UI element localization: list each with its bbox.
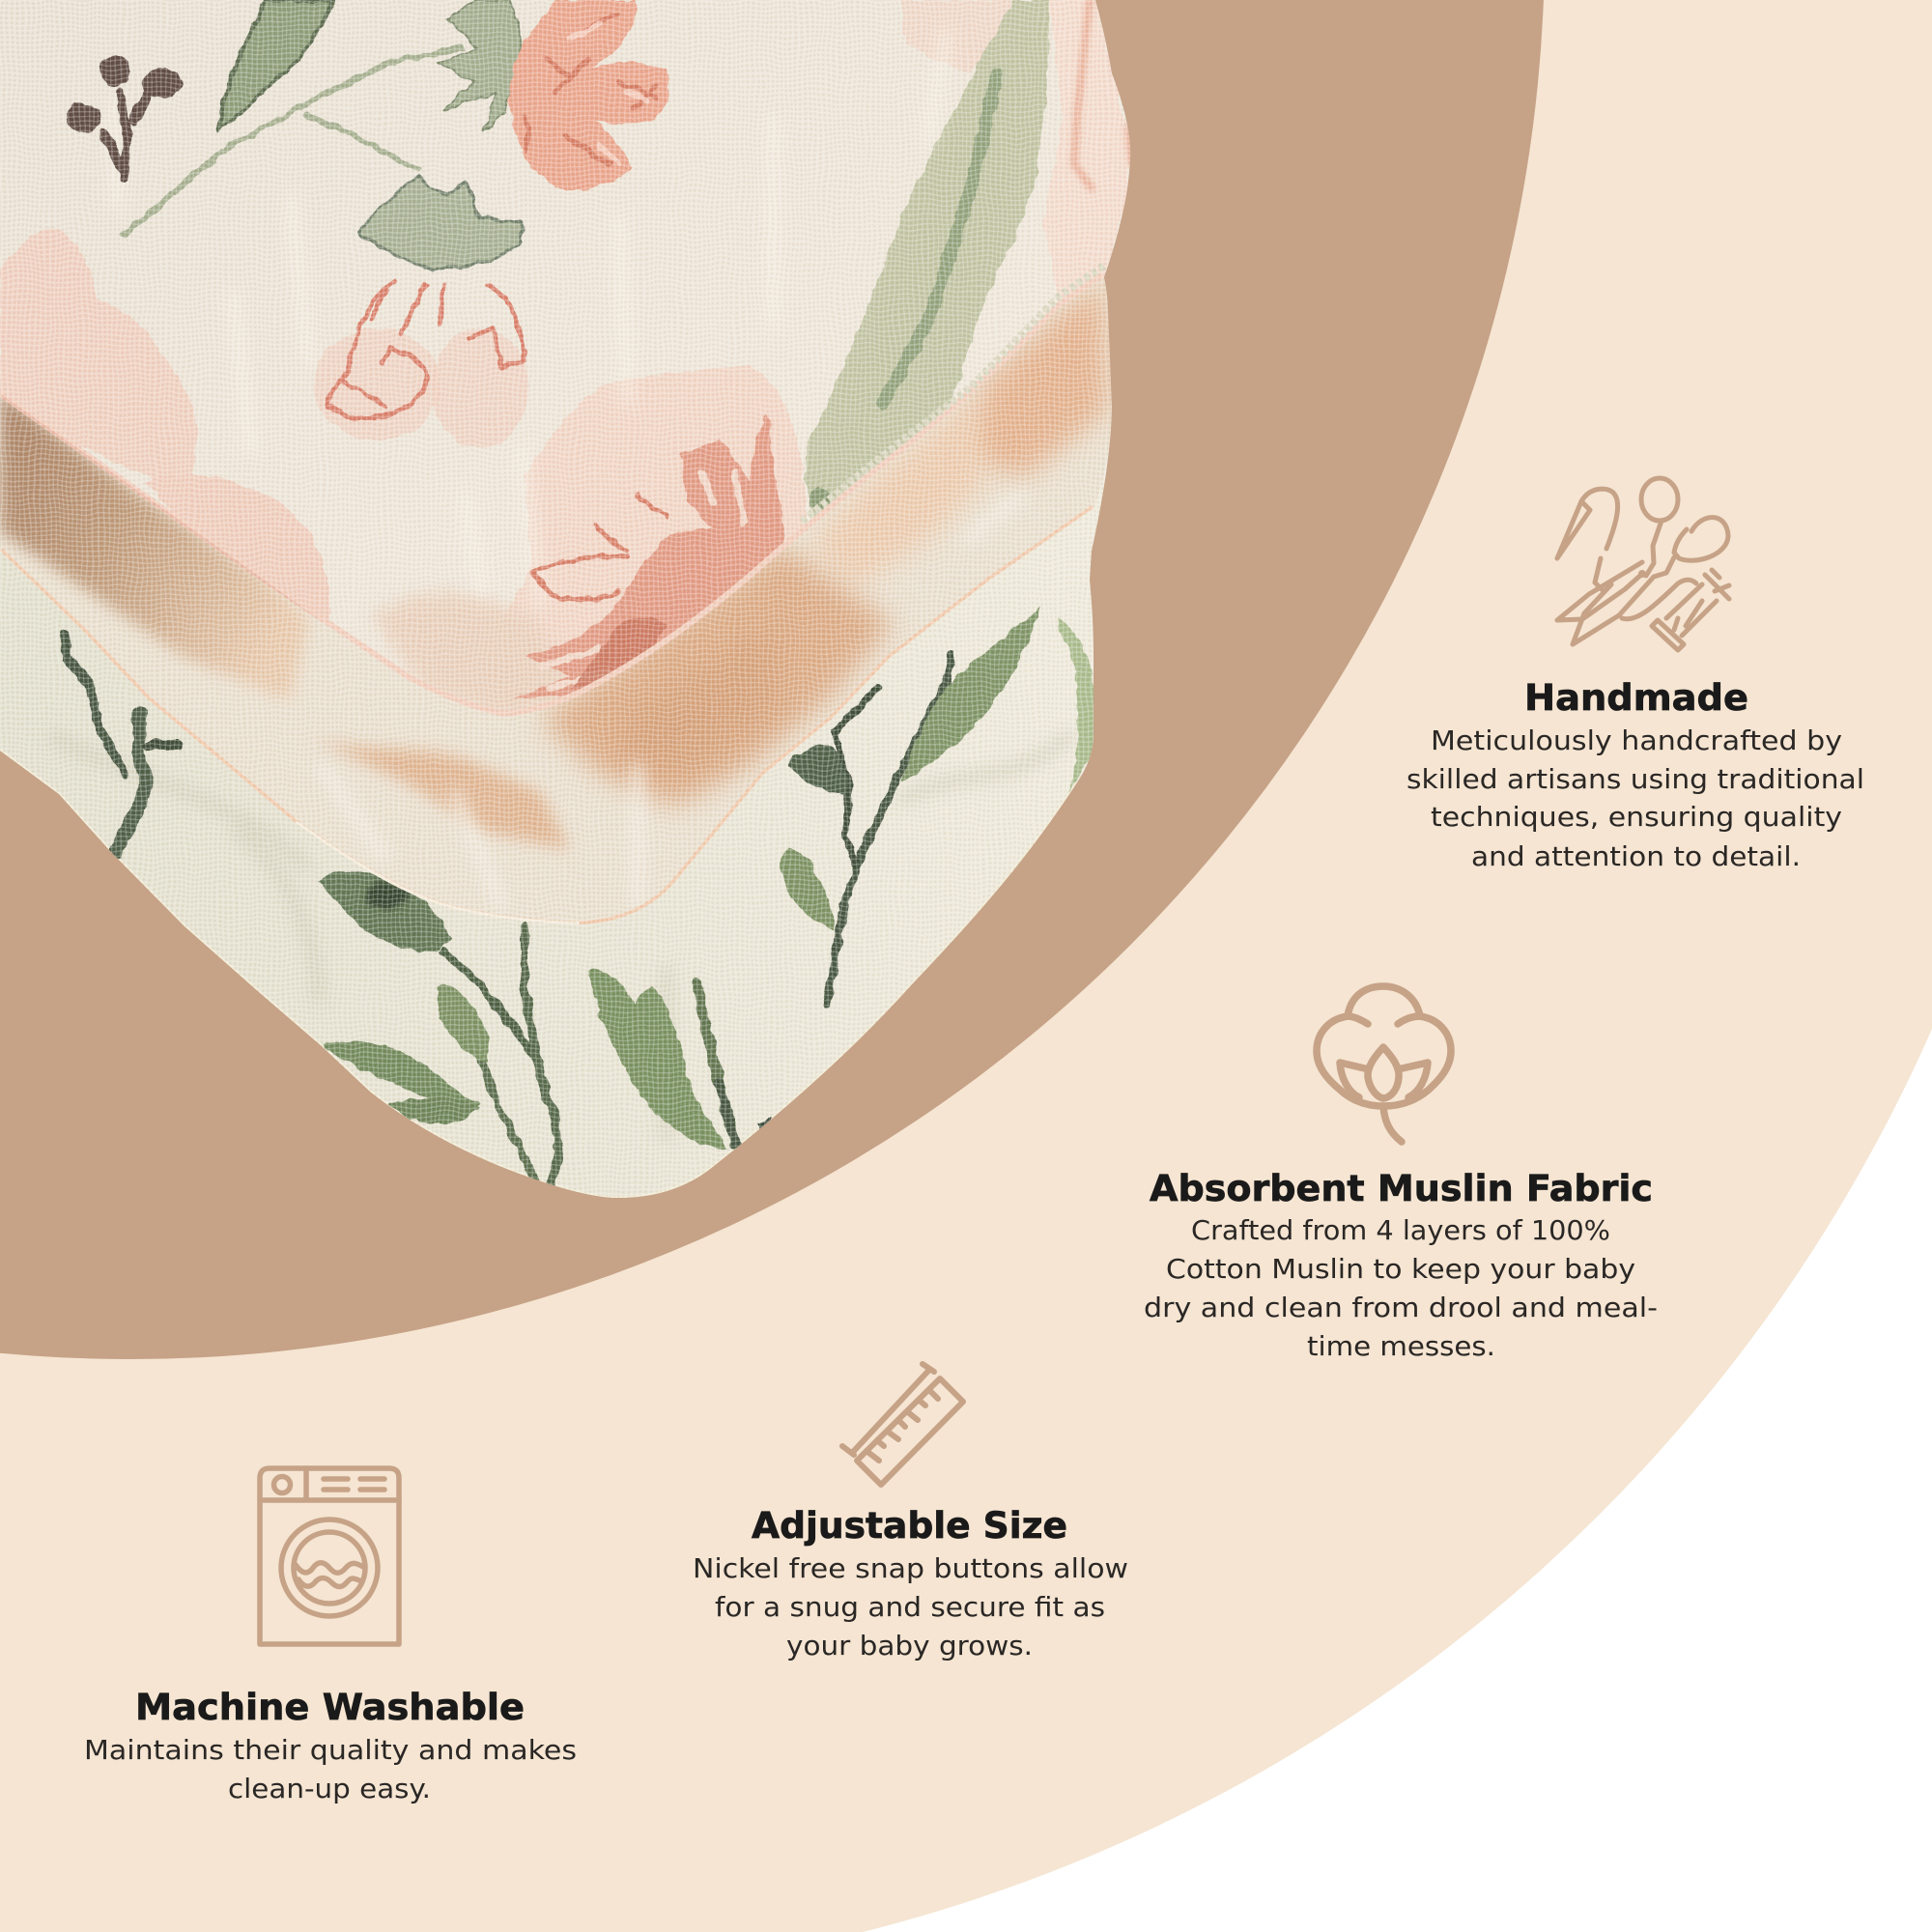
heading: Machine Washable: Machine Washable <box>135 1686 525 1728</box>
text: Handmade description: Meticulously handcrafted by <box>1431 725 1842 756</box>
middle bib: peach wash <box>0 270 1121 937</box>
heading: Handmade: Handmade <box>1524 676 1748 719</box>
text: Handmade description: and attention to detail. <box>1471 841 1801 872</box>
text: Machine Washable description: clean-up easy. <box>228 1774 431 1804</box>
brown arc panel <box>0 0 1545 1359</box>
text: Adjustable description: for a snug and secure fit as <box>715 1592 1105 1623</box>
heading: Adjustable Size: Adjustable Size <box>752 1504 1067 1547</box>
text: Adjustable description: your baby grows. <box>786 1631 1033 1662</box>
green leaf and stems <box>124 0 522 270</box>
feature: Absorbent Muslin Fabric <box>1144 986 1658 1362</box>
text: Handmade description: techniques, ensuring quality <box>1431 802 1842 833</box>
text: Machine Washable description: Maintains their quality and makes <box>84 1735 577 1766</box>
text: Absorbent description: time messes. <box>1307 1331 1495 1362</box>
text: Absorbent description: dry and clean from drool and meal- <box>1144 1293 1658 1323</box>
text: Adjustable description: Nickel free snap buttons allow <box>693 1553 1128 1584</box>
text: Absorbent description: Cotton Muslin to keep your baby <box>1166 1254 1635 1285</box>
icon: washing machine <box>260 1468 399 1644</box>
bottom bib: sage leaf print <box>0 425 1121 1217</box>
coral flower, large lower <box>514 415 784 698</box>
product photo: layered muslin bibs <box>0 0 1140 1217</box>
fabric weave texture <box>0 0 1140 1208</box>
text: Handmade description: skilled artisans using traditional <box>1406 764 1864 795</box>
watercolour pink washes <box>0 0 1130 720</box>
feature: Adjustable Size <box>693 1364 1128 1662</box>
text: Absorbent description: Crafted from 4 layers of 100% <box>1191 1215 1610 1246</box>
coral bud flower <box>327 280 524 418</box>
text: Handmade description <box>1406 725 1864 872</box>
heading: Absorbent Muslin Fabric: Absorbent Muslin Fabric <box>1150 1167 1653 1209</box>
feature: Machine Washable <box>84 1468 577 1804</box>
text: Machine Washable description <box>84 1735 577 1804</box>
hem band with stitching <box>0 277 1104 717</box>
icon: ruler <box>842 1364 963 1485</box>
icon: cotton boll <box>1317 986 1451 1142</box>
text: Adjustable description <box>693 1553 1128 1662</box>
fabric wrinkles <box>524 35 951 603</box>
feature: Handmade <box>1406 478 1864 872</box>
top bib: coral floral print <box>0 0 1140 734</box>
coral flower, top <box>509 0 668 190</box>
text: Absorbent description <box>1144 1215 1658 1362</box>
sage watercolour leaf <box>806 0 1049 518</box>
brown berry sprig <box>66 55 182 180</box>
icon: scissors, needle and spool <box>1557 478 1729 650</box>
